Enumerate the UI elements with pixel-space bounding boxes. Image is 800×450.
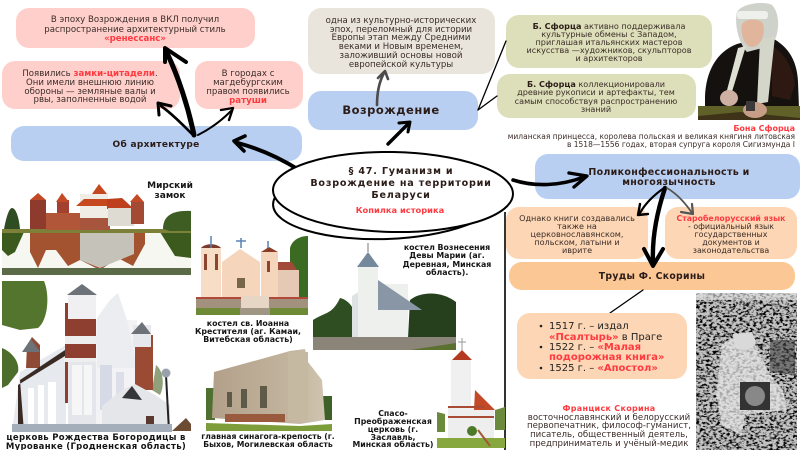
panel: Old Belarusian language: документов и (702, 238, 760, 247)
caption: Bykhov synagogue: главная синагога-крепость (г. (201, 432, 335, 441)
divider line (504, 212, 506, 450)
panel: renaissance definition: одна из культурно-исторических (326, 16, 476, 26)
caption: Mir Castle (147, 181, 193, 201)
caption: Bona Sforza (508, 124, 795, 149)
panel: Sforza cultural exchange: культурные обмены с Западом, (541, 29, 677, 39)
image: Skaryna woodcut (696, 293, 797, 450)
panel: dates of Skaryna books: «Псалтырь» в Праге (549, 332, 662, 343)
arrow: architecture to renaissance style (165, 48, 194, 135)
panel: dates of Skaryna books (517, 313, 687, 379)
image: church in Derevnaya (313, 243, 456, 350)
panel: book languages: иврите (562, 245, 592, 255)
caption: church in Kamai: Крестителя (аг. Камаи, (195, 327, 301, 336)
heading: multi-confessional (535, 154, 800, 199)
caption: Francisk Skaryna: предприниматель и учёный-медик (530, 439, 688, 449)
panel: town halls: ратуши (229, 96, 267, 106)
arrow: renaissance to definition (377, 71, 388, 105)
panel: renaissance definition: европейской культуры (349, 60, 453, 70)
image: Zaslavl church (437, 338, 505, 448)
caption: church in Kamai (195, 319, 301, 344)
heading: about architecture: Об архитектуре (113, 139, 199, 150)
title oval: Копилка историка (356, 205, 444, 215)
caption: Bona Sforza: миланская принцесса, королева польская и великая княгиня литовская (508, 132, 795, 141)
caption: Zaslavl church: церковь (г. (368, 425, 418, 434)
panel: castles: Они имели внешнюю линию (26, 78, 154, 88)
caption: Mir Castle: замок (155, 191, 185, 201)
caption: Francisk Skaryna: восточнославянский и белорусский (528, 413, 690, 423)
panel: Old Belarusian language: - официальный язык (688, 222, 774, 231)
caption: church in Derevnaya (403, 243, 491, 277)
image: Murovanka church (2, 281, 191, 432)
panel: Sforza cultural exchange: Б. Сфорца активно поддерживала (533, 21, 685, 31)
panel: renaissance definition: заложивший основы новой (340, 51, 462, 61)
panel: town halls (195, 61, 303, 109)
panel: Sforza collections: самым способствуя распространению (515, 96, 678, 106)
caption: Bykhov synagogue (201, 432, 335, 449)
arrow: title to architecture (234, 136, 299, 170)
panel: book languages (506, 207, 648, 259)
title oval (272, 150, 514, 243)
panel: castles: рвы, заполненные водой (33, 95, 147, 105)
caption: Zaslavl church: Преображенская (354, 417, 432, 426)
caption: church in Derevnaya: область). (426, 267, 468, 277)
caption: Zaslavl church: Спасо- (378, 409, 408, 418)
caption: Francisk Skaryna: писатель, общественный деятель, (530, 430, 688, 440)
panel: renaissance style: В эпоху Возрождения в ВКЛ получил (51, 15, 219, 25)
heading: multi-confessional: многоязычность (622, 177, 716, 188)
connector: works to dates (610, 290, 643, 313)
caption: Francisk Skaryna: первопечатник, философ-гуманист, (527, 421, 691, 431)
panel: Sforza collections: знаний (581, 104, 611, 114)
image: portrait of Bona Sforza (698, 3, 800, 120)
panel: Old Belarusian language (665, 207, 797, 259)
panel: book languages: также на (557, 221, 597, 231)
panel: Old Belarusian language: Старобелорусский язык (677, 214, 786, 223)
caption: Murovanka church (6, 433, 186, 450)
panel: dates of Skaryna books: 1517 г. – издал (549, 321, 629, 332)
caption: Zaslavl church (353, 409, 433, 449)
caption: church in Derevnaya: костел Вознесения (404, 243, 490, 252)
title oval: Возрождение на территории (310, 178, 492, 189)
panel: renaissance style: распространение архитектурный стиль (44, 25, 226, 35)
image: Mir Castle (2, 184, 191, 275)
caption: Bykhov synagogue: Быхов, Могилевская область (203, 440, 333, 449)
panel: Sforza cultural exchange: и архитекторов (575, 53, 643, 63)
panel: Sforza collections (497, 74, 696, 118)
caption: church in Kamai: Витебская область) (203, 334, 293, 344)
panel: renaissance definition: эпох, переломный для истории (330, 25, 472, 35)
panel: renaissance definition: веками и Новым временем, (339, 42, 463, 52)
caption: Murovanka church: церковь Рождества Богородицы в (6, 433, 186, 443)
panel: Old Belarusian language: законодательства (693, 246, 769, 255)
panel: renaissance style: «ренессанс» (104, 34, 166, 44)
heading: renaissance: Возрождение (342, 103, 440, 117)
arrow: to Skaryna works (644, 188, 665, 266)
title oval: § 47. Гуманизм и (349, 166, 453, 177)
caption: church in Kamai: костел св. Иоанна (207, 319, 289, 328)
panel: renaissance definition (308, 8, 495, 74)
caption: Francisk Skaryna: Франциск Скорина (563, 404, 655, 413)
image: Bykhov synagogue (206, 349, 332, 431)
panel: castles: Появились замки-цитадели. (22, 69, 158, 79)
image: church in Kamai (196, 236, 308, 315)
title oval: Беларуси (371, 190, 431, 201)
panel: town halls: В городах с (222, 69, 275, 79)
panel: book languages: польском, латыни и (534, 237, 620, 247)
panel: Sforza cultural exchange: искусства —художников, скульпторов (526, 45, 692, 55)
panel: Old Belarusian language: государственных (695, 230, 768, 239)
caption: church in Derevnaya: Деревная, Минская (403, 260, 491, 269)
panel: dates of Skaryna books: 1522 г. – «Малая (549, 342, 641, 353)
heading: renaissance (308, 91, 478, 130)
caption: Bona Sforza: Бона Сфорца (733, 124, 795, 133)
heading: Skaryna works: Труды Ф. Скорины (599, 271, 705, 282)
caption: Bona Sforza: в 1518—1556 годах, вторая супруга короля Сигизмунда I (567, 140, 795, 149)
arrow: architecture to town halls (198, 108, 233, 135)
panel: renaissance style (16, 8, 255, 48)
arrow: to book languages (638, 188, 664, 215)
panel: town halls: правом появились (206, 87, 290, 97)
caption: Mir Castle: Мирский (147, 181, 193, 191)
panel: Sforza collections: Б. Сфорца коллекционировали (527, 79, 665, 89)
panel: town halls: магдебургским (213, 78, 283, 88)
arrow: title to renaissance (388, 122, 410, 144)
panel: castles: обороны — земляные валы и (24, 87, 156, 97)
heading: Skaryna works (509, 262, 795, 290)
panel: book languages: Однако книги создавались (519, 213, 635, 223)
heading: about architecture (11, 126, 302, 161)
caption: Zaslavl church: Минская область) (353, 440, 433, 449)
panel: dates of Skaryna books: подорожная книга» (549, 352, 664, 363)
panel: dates of Skaryna books: 1525 г. – «Апостол» (549, 363, 658, 374)
panel: Sforza collections: древние рукописи и артефакты, тем (517, 87, 675, 97)
arrow: architecture to castles (158, 103, 193, 135)
caption: church in Derevnaya: Девы Марии (аг. (409, 251, 485, 260)
arrow: to Old Belarusian language (667, 188, 693, 214)
panel: renaissance definition: Европы этап между Средними (332, 33, 470, 43)
panel: Sforza cultural exchange: приглашая итальянских мастеров (536, 37, 683, 47)
heading: multi-confessional: Поликонфессиональность и (588, 167, 750, 178)
caption: Francisk Skaryna (527, 404, 691, 449)
caption: Zaslavl church: Заславль, (371, 433, 416, 442)
arrow: title to multi-confessional (513, 173, 587, 187)
connectors: renaissance to Sforza panels (478, 41, 506, 110)
panel: Sforza cultural exchange (506, 15, 712, 68)
panel: castles (2, 61, 180, 109)
panel: book languages: церковнославянском, (531, 229, 623, 239)
